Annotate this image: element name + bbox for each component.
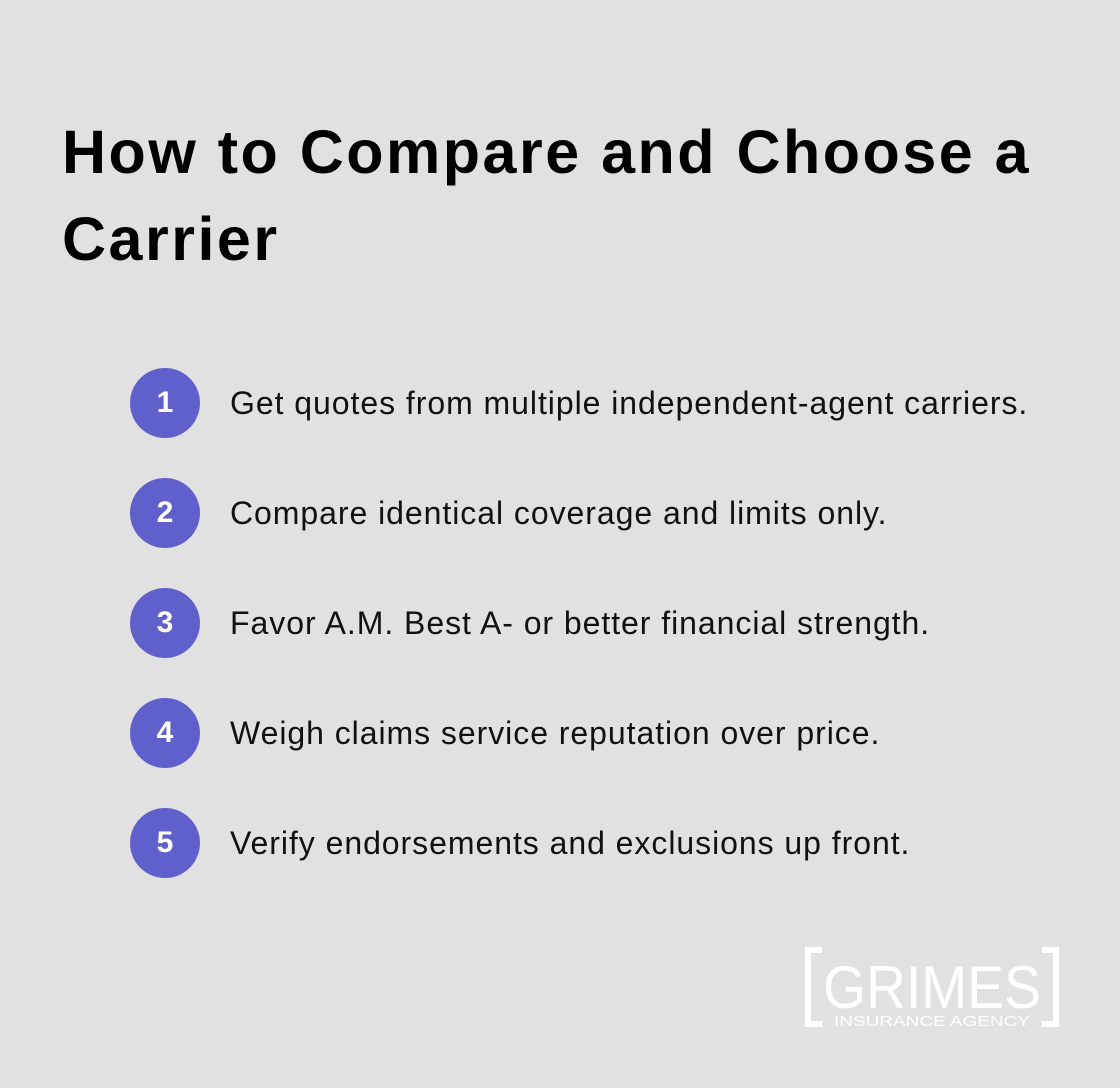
step 3: 3 bbox=[157, 606, 173, 639]
title: How to Compare and Choose a bbox=[62, 118, 1031, 186]
step 2: 2 bbox=[157, 496, 173, 529]
step 4: Weigh claims service reputation over price. bbox=[230, 715, 880, 751]
step 4: 4 bbox=[157, 716, 173, 749]
list bbox=[130, 368, 1028, 878]
title: Carrier bbox=[62, 205, 280, 273]
step 5 bbox=[130, 808, 910, 878]
step 1: 1 bbox=[157, 386, 173, 419]
step 3: Favor A.M. Best A- or better financial strength. bbox=[230, 605, 930, 641]
step 3 bbox=[130, 588, 930, 658]
step 4 bbox=[130, 698, 880, 768]
title bbox=[62, 118, 1031, 273]
step 2: Compare identical coverage and limits only. bbox=[230, 495, 887, 531]
step 5: Verify endorsements and exclusions up front. bbox=[230, 825, 910, 861]
step 2 bbox=[130, 478, 887, 548]
step 5: 5 bbox=[157, 826, 173, 859]
step 1 bbox=[130, 368, 1028, 438]
logo: GRIMES bbox=[823, 954, 1041, 1021]
step 1: Get quotes from multiple independent-agent carriers. bbox=[230, 385, 1028, 421]
logo: INSURANCE AGENCY bbox=[834, 1013, 1030, 1030]
